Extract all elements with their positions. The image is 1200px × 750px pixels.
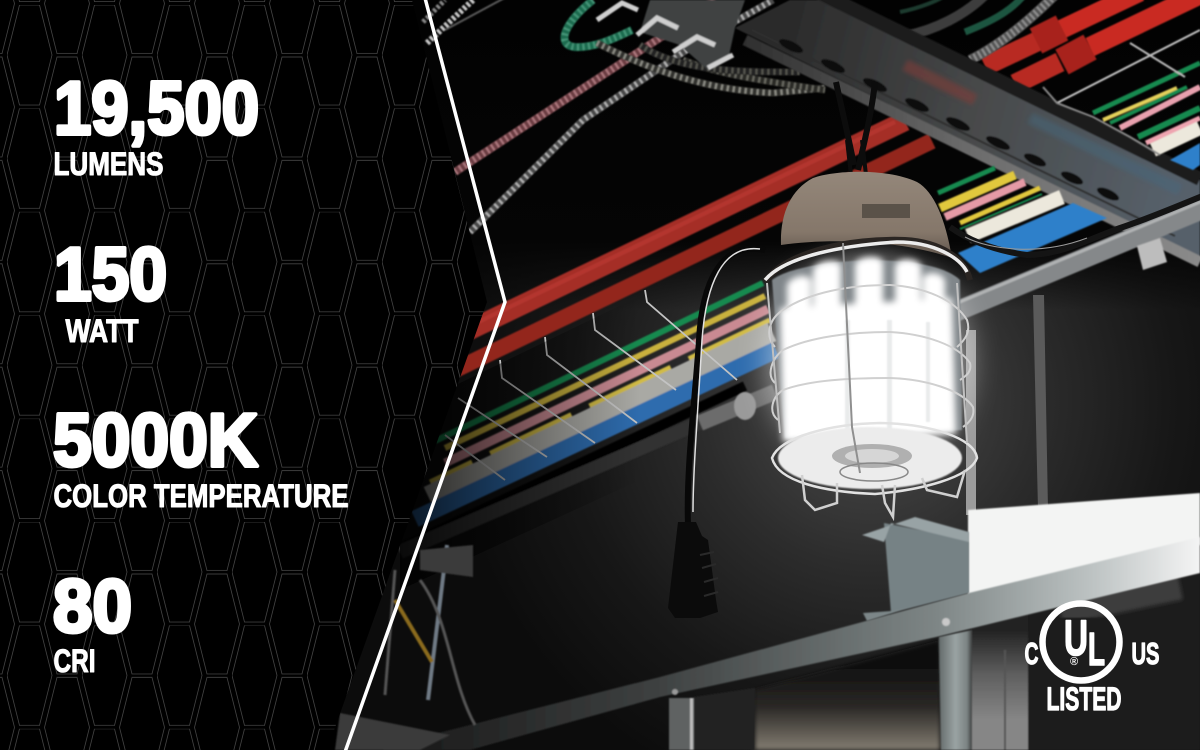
photo: black power cord: [950, 195, 1200, 255]
photo: red sprinkler pipes: [455, 121, 932, 370]
value: 19,500: [54, 66, 259, 150]
unit: WATT: [66, 313, 139, 349]
US letters: US: [1132, 636, 1160, 671]
left black panel with hexagon pattern: [0, 0, 487, 750]
L letter: L: [1088, 623, 1105, 675]
photo: grey conduit behind lamp: [955, 200, 1200, 312]
spec: color temperature: [53, 398, 348, 514]
photo: steel I-beam: [862, 517, 969, 621]
photo: conduit brackets: [597, 0, 745, 70]
photo: left tray wire grid: [445, 290, 737, 480]
UL listed certification mark: [1024, 604, 1160, 717]
lamp dome housing: [765, 172, 970, 282]
value: 80: [53, 564, 132, 648]
spec: watt: [54, 232, 167, 349]
U letter: U: [1064, 610, 1088, 666]
lamp hook clips: [836, 82, 875, 175]
extension cord and outlet: [668, 249, 765, 618]
photo: white panel: [968, 493, 1200, 600]
photo: rods and clamp at lower left: [335, 545, 475, 750]
photo: dimming of the tray toward the left: [400, 296, 640, 590]
photo: left cable tray with coloured cables: [400, 283, 776, 552]
photo: upper-right red pipes: [985, 0, 1200, 84]
lamp bottom disc: [778, 427, 962, 489]
photo: vertical posts behind lamp: [966, 295, 1048, 515]
photo: right cable tray with coloured cables: [938, 30, 1200, 273]
photo: lower wall and posts: [669, 572, 1200, 750]
photo: bottom steel rail: [383, 537, 1200, 750]
logo ring: [1042, 604, 1120, 680]
C letter: C: [1024, 636, 1038, 671]
photo: steel strut channel: [735, 0, 1200, 262]
white chevron outline: [345, 0, 505, 750]
spec: lumens: [54, 66, 259, 182]
value: 150: [54, 232, 167, 316]
unit: COLOR TEMPERATURE: [54, 478, 348, 514]
photo: flexible conduits: [423, 0, 1055, 232]
spec: CRI: [53, 564, 132, 679]
lamp LED body: [772, 257, 962, 442]
unit: CRI: [54, 643, 96, 679]
photo: dark ceiling void: [340, 0, 1200, 310]
value: 5000K: [53, 398, 258, 482]
lamp glow: [768, 255, 968, 465]
registered mark: ®: [1070, 656, 1078, 668]
unit: LUMENS: [54, 146, 164, 182]
photo: background wall: [340, 0, 1200, 750]
photo: conduit coupling: [734, 392, 756, 420]
LISTED: LISTED: [1046, 681, 1122, 717]
lamp wire cage: [765, 242, 977, 517]
